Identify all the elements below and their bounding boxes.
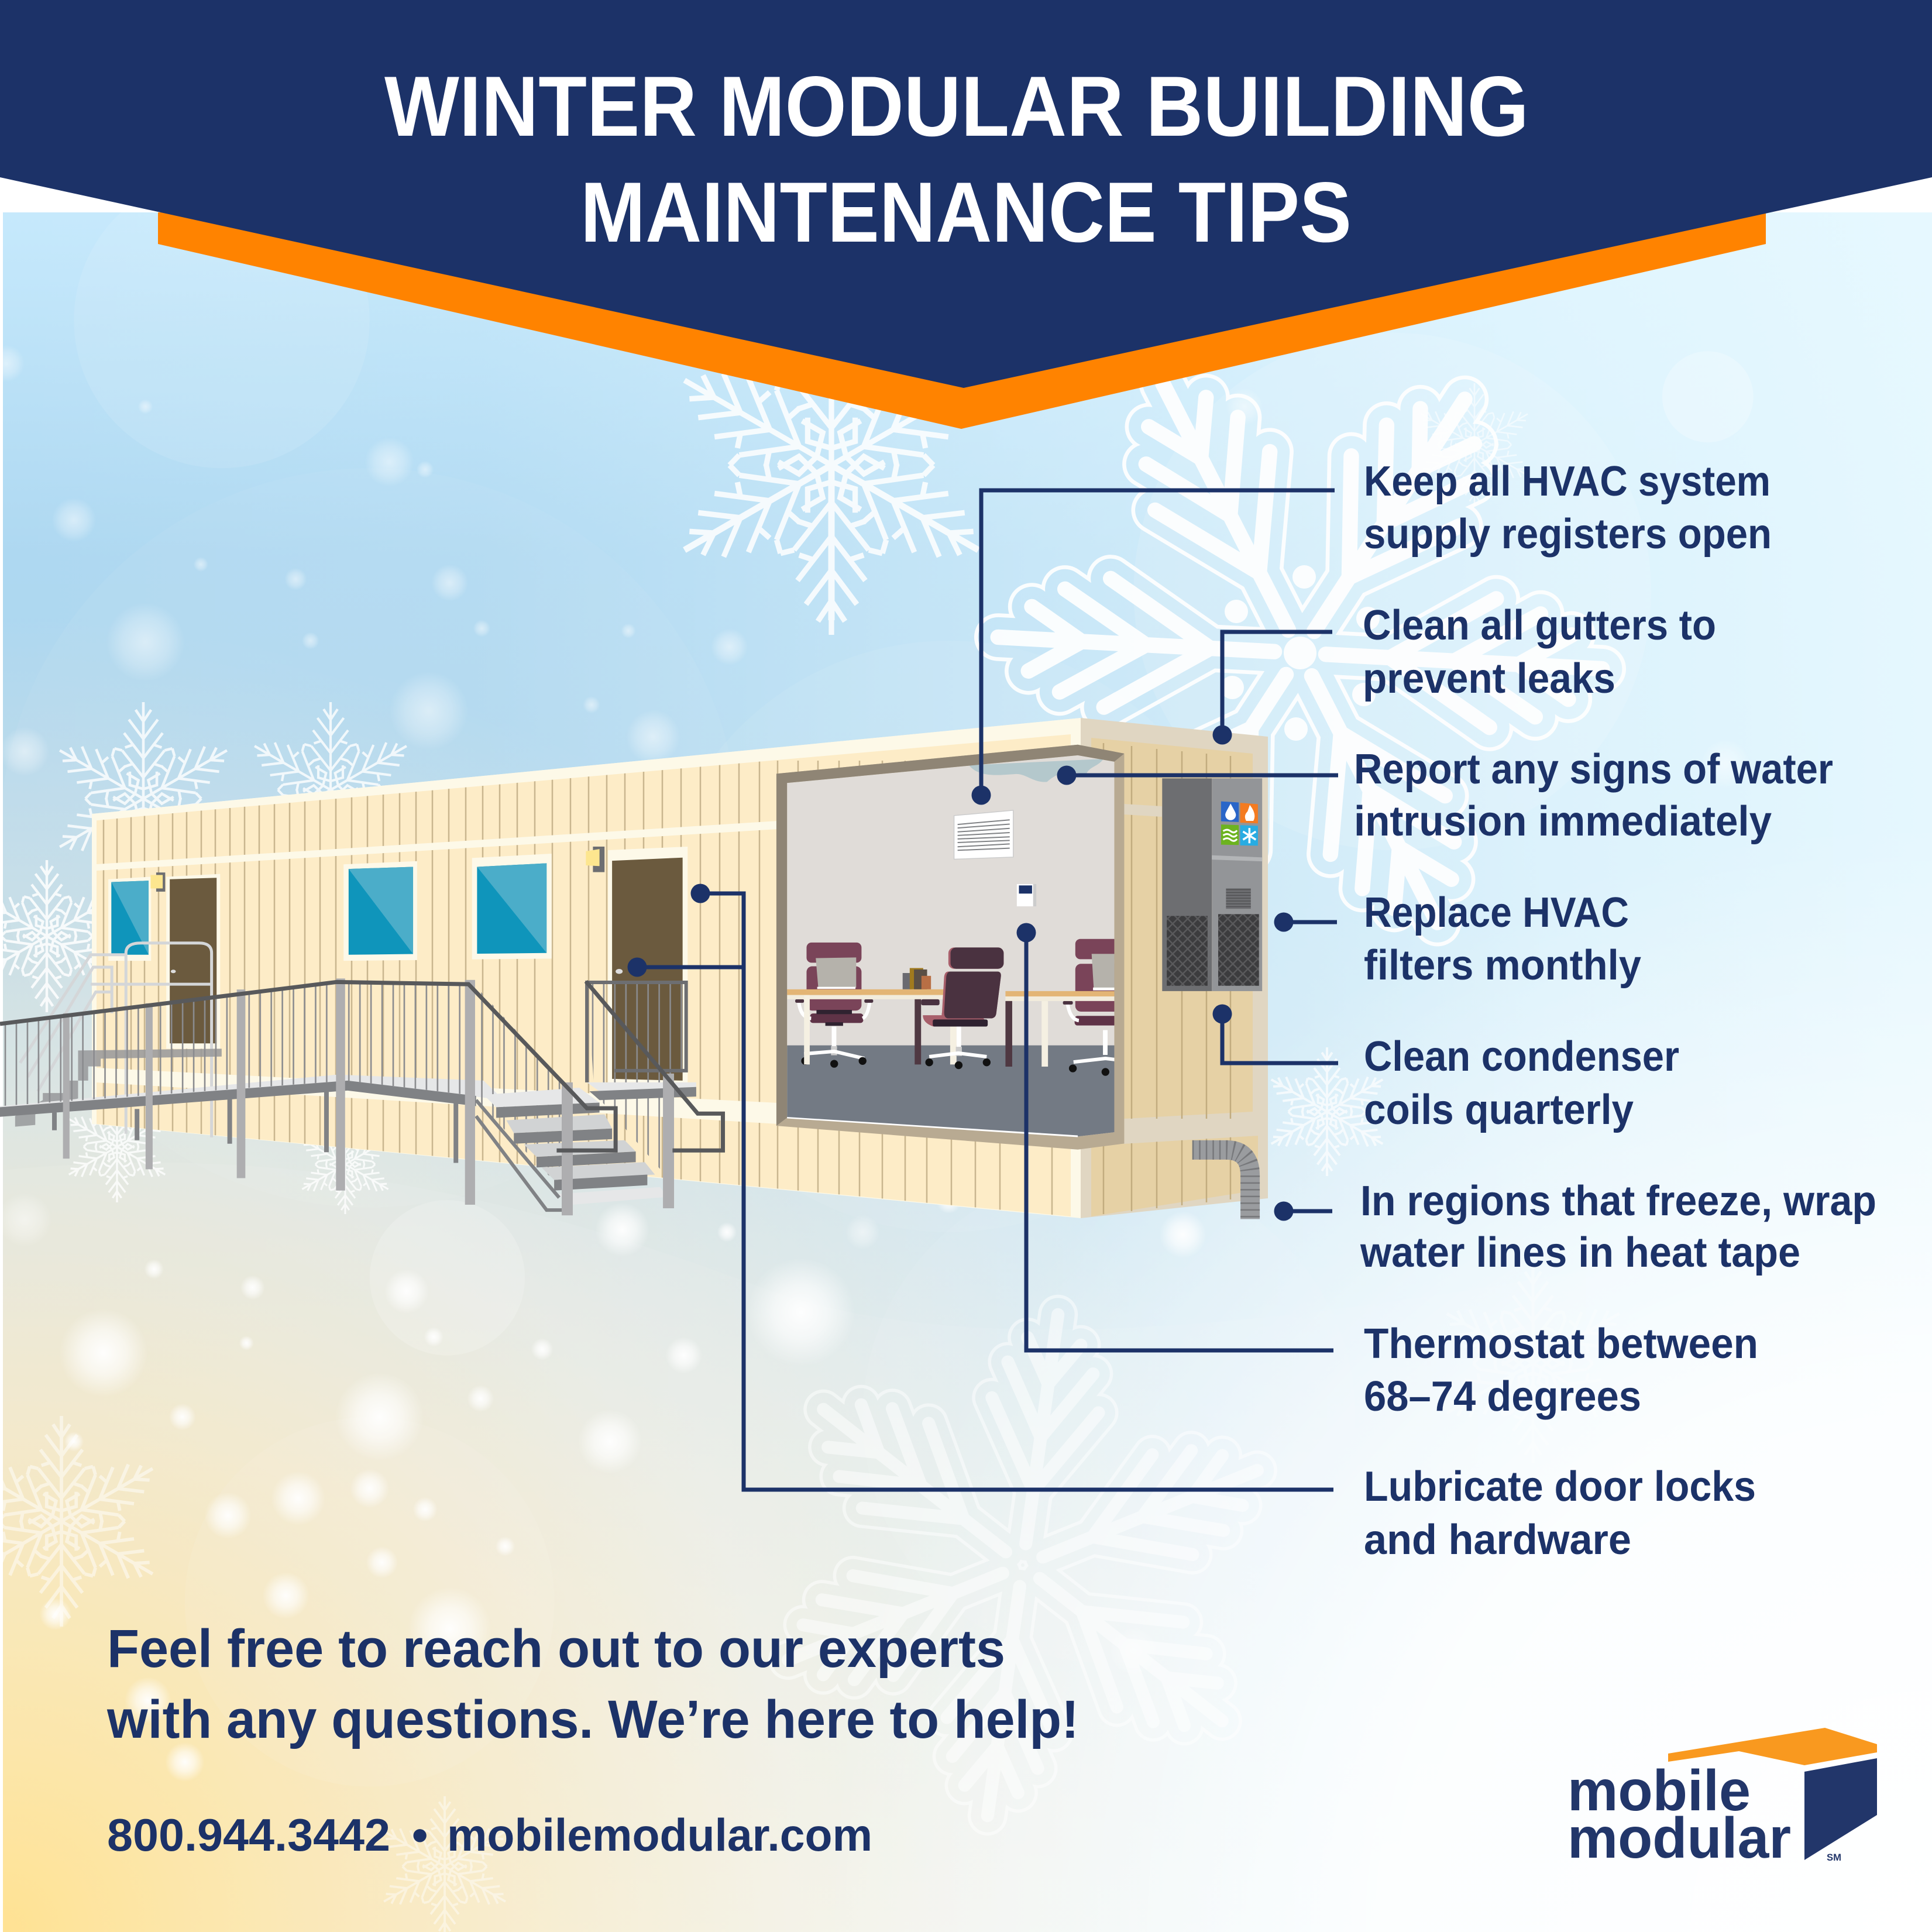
closing message: with any questions. We’re here to help! [106,1690,1079,1749]
tip: water lines [1360,1178,1876,1276]
tip: door locks [1364,1463,1756,1563]
window 1 [108,876,151,961]
chair right with laptop [1063,939,1114,1076]
icon: snowflake [1240,825,1258,845]
building right side wall [1081,718,1268,1218]
snowflake: left edge [0,860,124,1012]
bokeh snow lights [0,173,1754,1787]
navy chevron [0,0,1932,388]
tip: HVAC registers [1364,458,1772,558]
tip: thermostat [1364,1321,1758,1420]
logo roof [1668,1728,1877,1765]
contact details: 800.944.3442 [107,1809,390,1861]
callout line: gutters [1212,632,1332,744]
building front wall [92,718,1081,1229]
logo service mark: SM [1827,1852,1841,1863]
closing message: Feel free to reach out to our experts [107,1619,1005,1679]
callout line: water intrusion [1057,765,1338,785]
faint door railing [20,943,212,1137]
snowflake: lower right faint [1432,1264,1634,1463]
air register [954,810,1013,859]
snowflake: cream lower left [0,1416,169,1627]
contact details [107,1809,872,1861]
title: WINTER MODULAR BUILDING [384,59,1529,154]
tip: thermostat: 68–74 degrees [1364,1373,1641,1420]
logo wall [1804,1758,1877,1860]
snowflake: below ramp left [60,1091,174,1202]
flexible duct [1192,1150,1250,1219]
tip: water lines: In regions that freeze, wrap [1360,1178,1876,1225]
landing [587,1082,696,1100]
stair balusters left [476,986,567,1194]
tip: door locks: and hardware [1364,1517,1631,1563]
tip: gutters [1363,602,1716,702]
closing message [106,1619,1079,1749]
tip: water intrusion [1354,746,1833,845]
snowflake: large outlined bottom center [768,1295,1257,1732]
ramp balusters [0,982,469,1106]
title: MAINTENANCE TIPS [580,164,1352,260]
window 2 [343,861,417,961]
icon: flame [1240,803,1258,823]
cutaway room [776,745,1262,1219]
upper landing rail [587,982,686,1082]
ramp deck [0,1075,504,1117]
thermostat [1017,884,1036,906]
contact details: mobilemodular.com [447,1809,872,1861]
handrails [0,981,723,1150]
logo: mobile modular [1567,1728,1877,1870]
water stain [969,759,1103,782]
logo wordmark: modular [1567,1806,1791,1870]
snowflake: detailed top center [659,295,1004,635]
tip: gutters: Clean all gutters to [1363,602,1716,649]
tip: condenser coils: Clean condenser [1364,1033,1679,1080]
chair left [795,943,873,1068]
room wall and floor [787,755,1114,1136]
snowflake: behind roof right [242,702,420,878]
stair stringers [476,1100,562,1210]
snowflake: below ramp right [295,1115,396,1214]
tip: HVAC filters [1364,889,1641,989]
HVAC unit [1162,778,1262,991]
ramp posts [63,978,674,1215]
logo wordmark [1567,1758,1791,1870]
door 1 [166,874,220,1048]
table left [787,989,957,1064]
tip: HVAC registers: supply registers open [1364,511,1772,558]
room frame [776,745,1124,1150]
table right [1005,991,1114,1067]
tip: door locks: Lubricate door locks [1364,1463,1756,1510]
header banner [0,0,1932,429]
modular building illustration [0,718,1268,1229]
window 3 [472,854,552,960]
snowflake: behind roof left [45,702,242,895]
logo wordmark: mobile [1567,1758,1751,1823]
callout line: condenser coils [1212,1004,1338,1063]
chair center [921,947,1003,1069]
callout line: thermostat [1017,923,1333,1350]
snowflake: bottom faint [373,1796,516,1932]
books [903,968,931,989]
orange chevron [158,212,1766,429]
stair treads [484,1088,668,1205]
tip: condenser coils [1364,1033,1679,1133]
tip: thermostat: Thermostat between [1364,1321,1758,1367]
wall light 2 [586,847,604,872]
wall light 1 [150,872,165,892]
icon: air waves [1221,824,1239,845]
callout line: HVAC registers [971,490,1335,805]
callout line: HVAC filters [1274,913,1337,931]
contact details: • [412,1809,428,1861]
callout line: door locks [627,884,1333,1490]
laptop left [816,957,856,989]
icon: water drop [1221,802,1239,822]
tip: water intrusion: intrusion immediately [1354,798,1772,845]
snowflake: right of building [1261,1047,1393,1176]
door 2 [608,847,687,1086]
faint rear stairs [15,1048,222,1127]
tip: HVAC filters: Replace HVAC [1364,889,1629,936]
tip: water lines: water lines in heat tape [1360,1229,1800,1276]
callout line: water lines [1274,1202,1332,1221]
ramp and stairs [0,943,723,1215]
snowflake: large outlined upper right [974,373,1626,947]
snowflake: faint inside large flake [1412,383,1537,506]
ramp support legs [54,1091,456,1163]
tip: gutters: prevent leaks [1363,655,1615,702]
windows and doors [108,847,687,1086]
tip: water intrusion: Report any signs of water [1354,746,1833,793]
title [384,59,1529,260]
upper landing balusters [587,983,686,1184]
tip: HVAC filters: filters monthly [1364,942,1641,989]
tip: condenser coils: coils quarterly [1364,1087,1634,1133]
tip: HVAC registers: Keep all HVAC system [1364,458,1771,505]
